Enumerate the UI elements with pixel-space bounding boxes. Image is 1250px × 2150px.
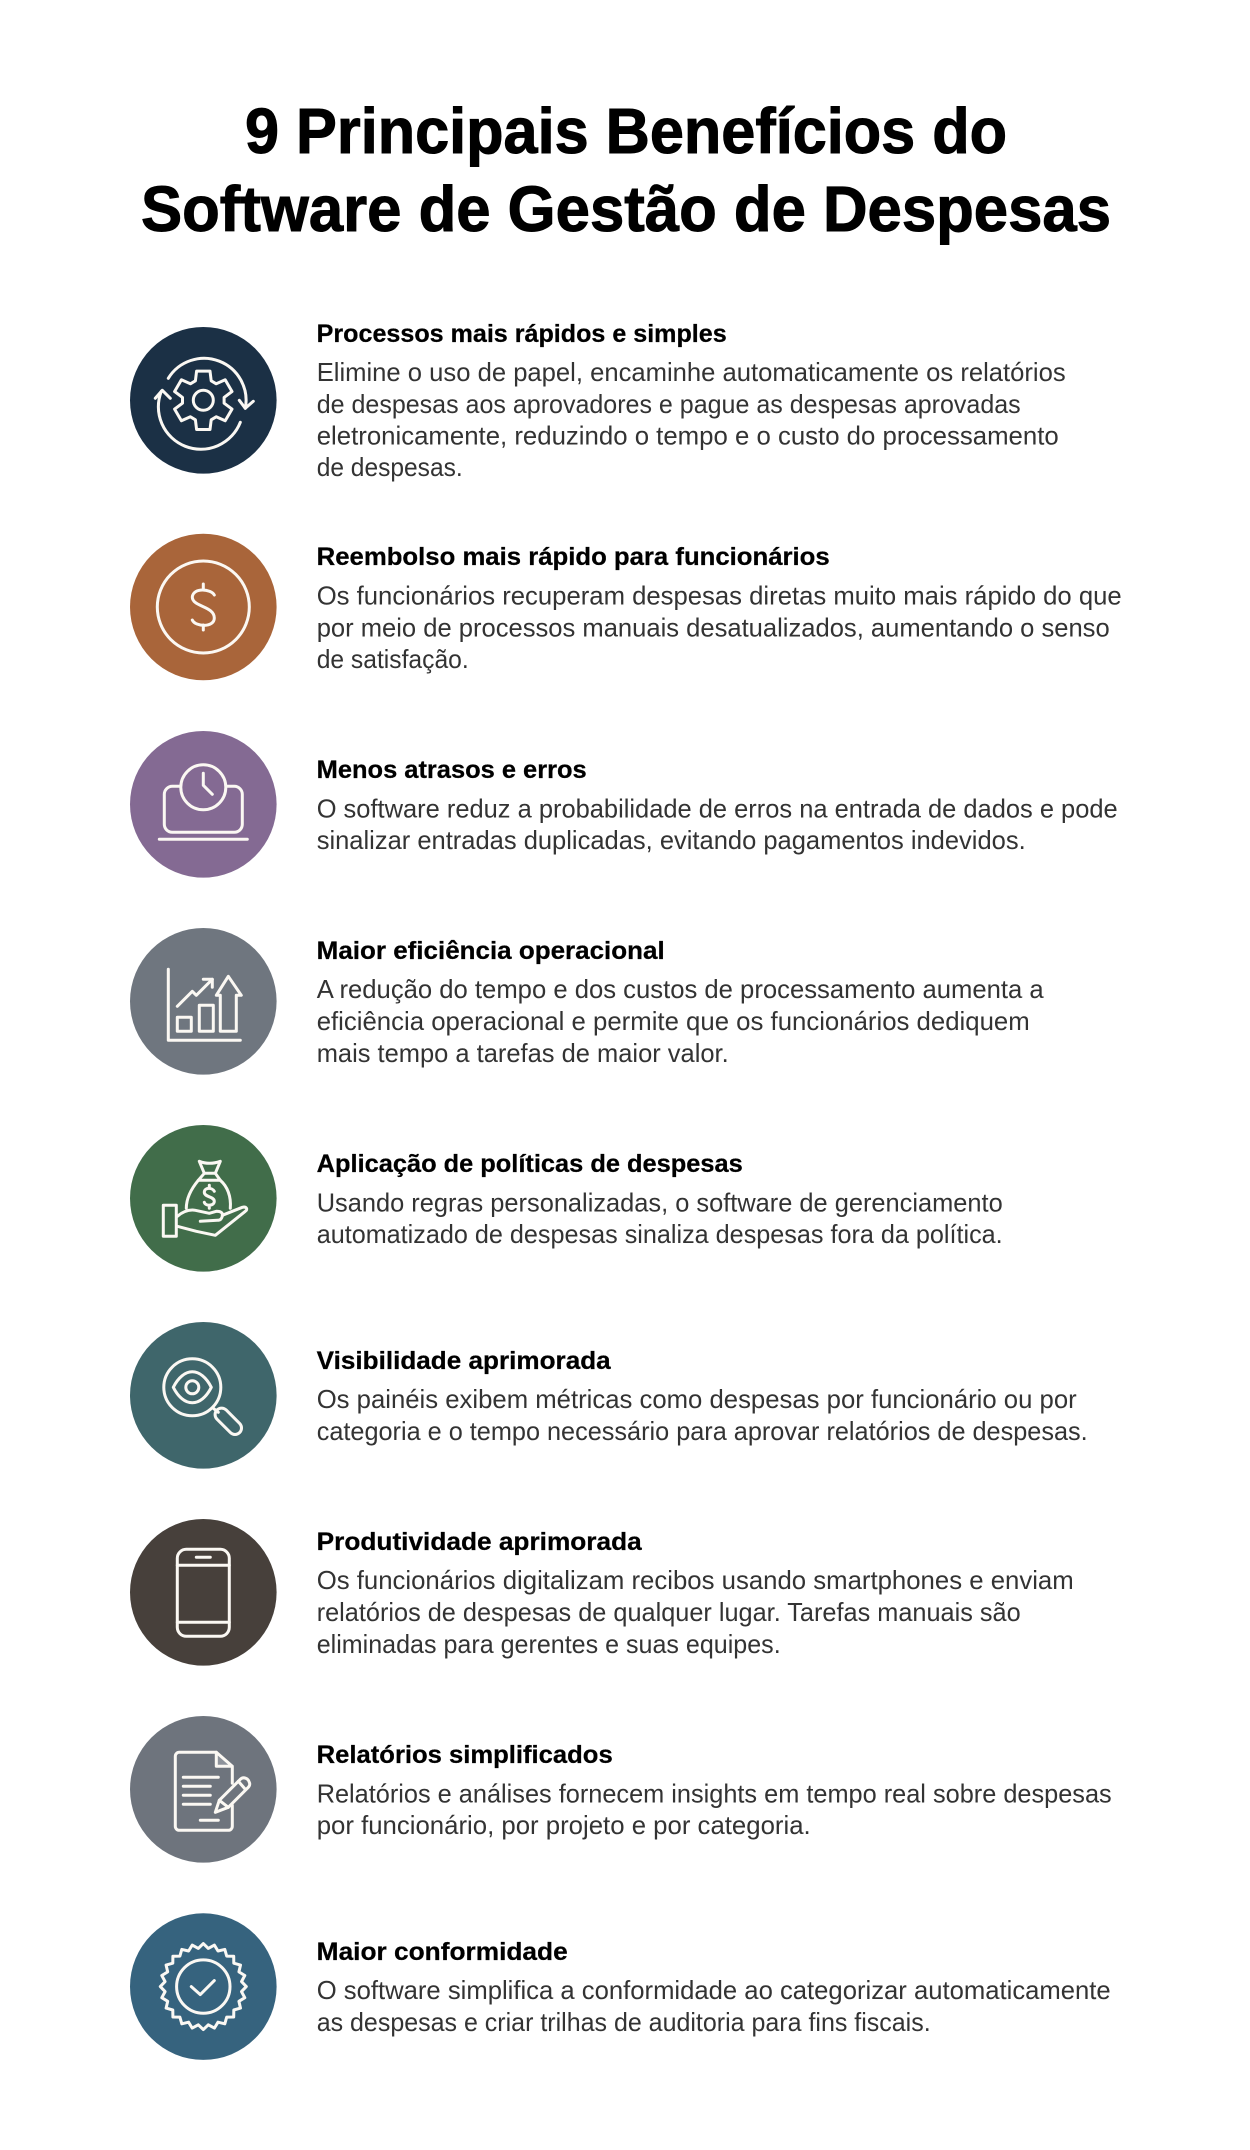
icon: document with pencil — [130, 1716, 277, 1863]
body text — [317, 1778, 1112, 1840]
body text: relatórios de despesas de qualquer lugar. Tarefas manuais são — [317, 1597, 1021, 1627]
icon: laptop with clock — [130, 731, 277, 878]
icon: magnifier with eye — [130, 1322, 277, 1469]
body text: Usando regras personalizadas, o software de gerenciamento — [317, 1188, 1003, 1218]
body text: A redução do tempo e dos custos de processamento aumenta a — [317, 974, 1044, 1004]
panel: maior eficiência operacional — [130, 928, 1044, 1075]
body text: de despesas aos aprovadores e pague as despesas aprovadas — [317, 389, 1021, 419]
body text: Os funcionários digitalizam recibos usando smartphones e enviam — [317, 1565, 1074, 1595]
body text: categoria e o tempo necessário para aprovar relatórios de despesas. — [317, 1416, 1088, 1446]
body text: eletronicamente, reduzindo o tempo e o custo do processamento — [317, 420, 1059, 450]
body text — [317, 357, 1066, 482]
panel: visibilidade aprimorada — [130, 1322, 1088, 1469]
icon: badge with check — [130, 1913, 277, 2060]
title — [141, 95, 1111, 245]
heading: Produtividade aprimorada — [317, 1528, 643, 1556]
body text — [317, 1384, 1088, 1446]
body text: por funcionário, por projeto e por categoria. — [317, 1810, 811, 1840]
body text — [317, 1188, 1003, 1249]
body text: automatizado de despesas sinaliza despesas fora da política. — [317, 1219, 1003, 1249]
body text — [317, 794, 1118, 855]
heading: Reembolso mais rápido para funcionários — [317, 543, 830, 571]
icon: smartphone — [130, 1519, 277, 1666]
heading: Visibilidade aprimorada — [317, 1347, 612, 1375]
panel: relatórios simplificados — [130, 1716, 1112, 1863]
body text: eficiência operacional e permite que os funcionários dediquem — [317, 1006, 1030, 1036]
panel: reembolso mais rápido — [130, 534, 1122, 680]
body text: O software simplifica a conformidade ao categorizar automaticamente — [317, 1975, 1111, 2005]
icon: growth chart — [130, 928, 277, 1075]
panel: produtividade aprimorada — [130, 1519, 1074, 1666]
heading: Processos mais rápidos e simples — [317, 320, 727, 348]
icon: hand holding money bag — [130, 1125, 277, 1272]
icon: dollar coin — [130, 534, 277, 680]
body text: sinalizar entradas duplicadas, evitando pagamentos indevidos. — [317, 825, 1026, 855]
body text: mais tempo a tarefas de maior valor. — [317, 1038, 729, 1068]
title: 9 Principais Benefícios do — [245, 95, 1007, 167]
panel: maior conformidade — [130, 1913, 1111, 2060]
icon: gear with circular arrows — [130, 327, 277, 474]
body text — [317, 974, 1044, 1068]
body text: de despesas. — [317, 452, 463, 482]
body text: Elimine o uso de papel, encaminhe automaticamente os relatórios — [317, 357, 1066, 387]
body text — [317, 1975, 1111, 2037]
panel: processos mais rápidos — [130, 320, 1066, 482]
body text: as despesas e criar trilhas de auditoria para fins fiscais. — [317, 2007, 931, 2037]
heading: Menos atrasos e erros — [317, 756, 587, 784]
body text: por meio de processos manuais desatualizados, aumentando o senso — [317, 612, 1110, 642]
body text: O software reduz a probabilidade de erros na entrada de dados e pode — [317, 794, 1118, 824]
panel: aplicação de políticas — [130, 1125, 1003, 1272]
body text: Os funcionários recuperam despesas diretas muito mais rápido do que — [317, 580, 1122, 610]
heading: Maior conformidade — [317, 1938, 568, 1966]
body text: eliminadas para gerentes e suas equipes. — [317, 1629, 781, 1659]
heading: Relatórios simplificados — [317, 1741, 613, 1769]
panel: menos atrasos e erros — [130, 731, 1118, 878]
body text: Relatórios e análises fornecem insights em tempo real sobre despesas — [317, 1778, 1112, 1808]
body text — [317, 1565, 1074, 1659]
body text — [317, 580, 1122, 674]
body text: de satisfação. — [317, 644, 469, 674]
heading: Aplicação de políticas de despesas — [317, 1150, 743, 1178]
title: Software de Gestão de Despesas — [141, 173, 1111, 245]
heading: Maior eficiência operacional — [317, 937, 665, 965]
body text: Os painéis exibem métricas como despesas por funcionário ou por — [317, 1384, 1077, 1414]
